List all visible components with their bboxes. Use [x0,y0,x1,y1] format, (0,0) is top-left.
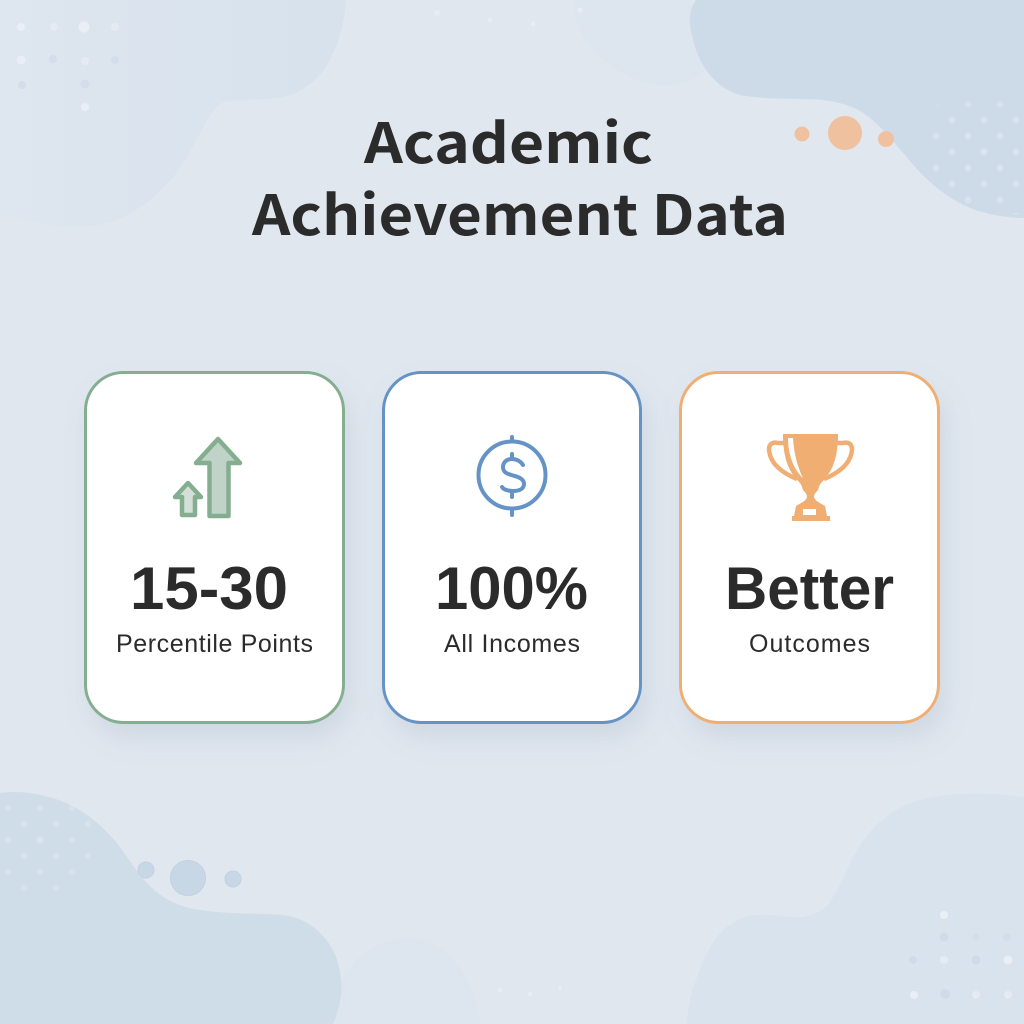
title [251,99,788,251]
blob: bottom right [687,793,1024,1024]
value: 100%: 100% [435,555,588,622]
title: Academic [363,99,653,179]
label: all incomes: All Incomes [444,630,580,658]
panel: all incomes [384,372,640,722]
blob: bottom left [0,792,342,1024]
dots: bottom right [909,911,1012,999]
blob: top right [690,0,1024,218]
icon: rising arrows [175,439,240,516]
value: better: Better [725,555,894,622]
label: percentile points: Percentile Points [116,630,313,658]
blue circles [138,860,241,896]
dots: bottom centre [498,986,562,996]
halftone dots: top right [932,103,1020,204]
panel: better outcomes [680,372,938,722]
icon: trophy [769,434,852,521]
label: outcomes: Outcomes [749,630,870,658]
dots: top centre [434,8,582,26]
orange circles [794,116,894,150]
blob: top left [0,0,346,227]
icon: dollar coin [478,437,546,515]
panel: percentile points [86,372,344,722]
dots: top left [16,22,119,111]
value: 15-30: 15-30 [130,555,288,622]
title: Achievement Data [251,171,788,251]
halftone dots: bottom left [20,820,44,860]
blob: bottom centre [335,938,480,1024]
blob: top centre [575,0,705,85]
